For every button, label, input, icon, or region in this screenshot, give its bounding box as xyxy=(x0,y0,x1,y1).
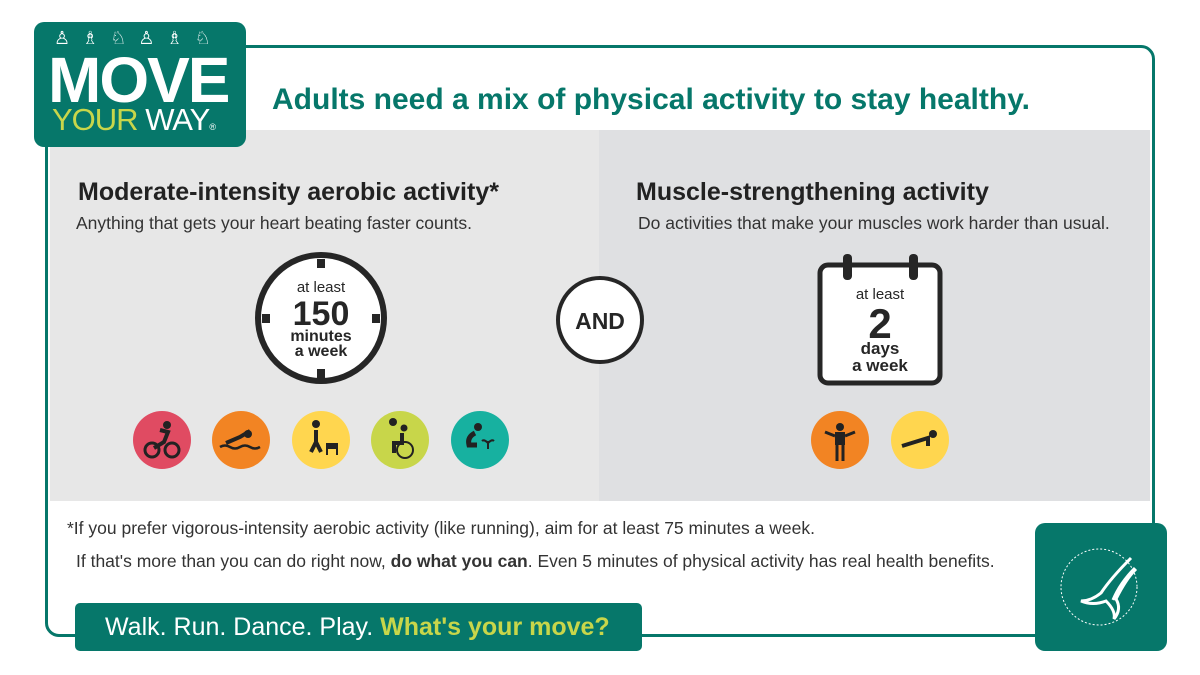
HHS logo xyxy=(1035,523,1167,651)
icon: wheelchair xyxy=(371,411,429,469)
calendar: days xyxy=(861,339,899,358)
icon: walk dog xyxy=(292,411,350,469)
clock: 150 xyxy=(293,295,349,333)
calendar: a week xyxy=(852,356,908,375)
logo figures: ♙♗♘♙♗♘ xyxy=(54,28,223,48)
tagline text: Walk. Run. Dance. Play. What's your move? xyxy=(105,613,610,641)
title: Adults need a mix of physical activity to stay healthy. xyxy=(272,83,1030,116)
muscle subtext: Do activities that make your muscles work harder than usual. xyxy=(638,213,1110,233)
aerobic heading: Moderate-intensity aerobic activity* xyxy=(78,178,499,206)
calendar xyxy=(820,254,940,383)
icon: bike xyxy=(133,411,191,469)
logo MOVE: MOVE xyxy=(48,44,228,116)
clock: at least xyxy=(297,279,346,296)
clock: minutes xyxy=(290,328,352,345)
note: do what you can: If that's more than you can do right now, do what you can. Even 5 minutes of physical activity has real health benefits. xyxy=(76,551,995,571)
logo: Move Your Way xyxy=(34,22,246,147)
muscle heading: Muscle-strengthening activity xyxy=(636,178,989,206)
icon: swim xyxy=(212,411,270,469)
clock xyxy=(258,255,384,381)
AND circle: AND xyxy=(575,308,625,334)
panel: aerobic xyxy=(50,130,599,501)
icon: gardening xyxy=(451,411,509,469)
footnote: *If you prefer vigorous-intensity aerobic activity (like running), aim for at least 75 minutes a week. xyxy=(67,518,815,538)
AND circle xyxy=(558,278,642,362)
panel: muscle xyxy=(599,130,1150,501)
calendar: at least xyxy=(856,286,905,303)
icon: push-up xyxy=(891,411,949,469)
calendar: 2 xyxy=(868,300,892,347)
logo YOUR WAY: YOUR WAY® xyxy=(52,102,215,137)
icon: weights xyxy=(811,411,869,469)
aerobic subtext: Anything that gets your heart beating faster counts. xyxy=(76,213,472,233)
clock: a week xyxy=(295,343,347,360)
tagline bar xyxy=(75,603,642,651)
